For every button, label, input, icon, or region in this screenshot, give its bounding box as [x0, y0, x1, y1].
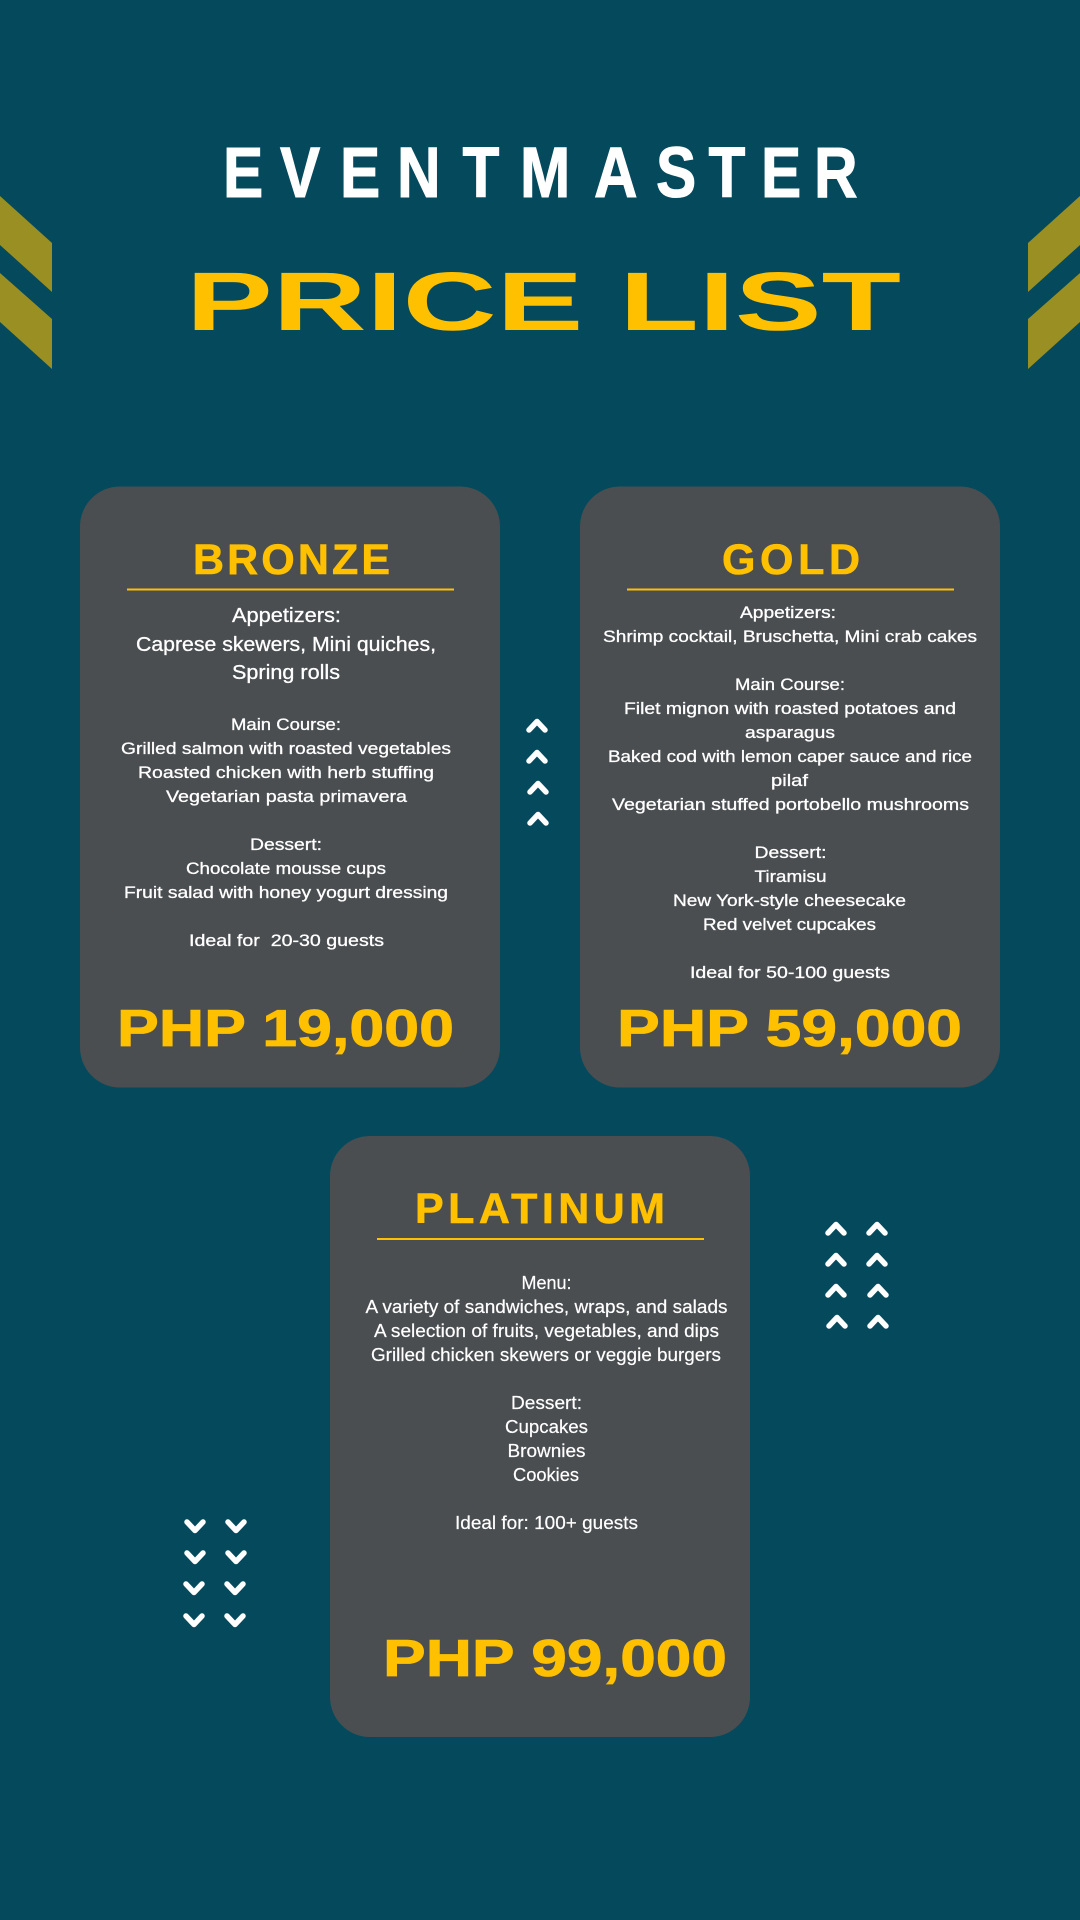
- text: bronze main course: Grilled salmon with roasted vegetables: [121, 739, 451, 758]
- text: platinum dessert: Cupcakes: [505, 1416, 588, 1437]
- text: platinum menu: A selection of fruits, vegetables, and dips: [374, 1320, 719, 1341]
- divider: gold: [627, 588, 954, 590]
- text: gold main course: Baked cod with lemon caper sauce and rice: [608, 747, 972, 766]
- text: bronze dessert: [124, 835, 448, 902]
- text: bronze dessert: Fruit salad with honey yogurt dressing: [124, 883, 448, 902]
- text: bronze guests: Ideal for 20-30 guests: [189, 931, 384, 950]
- text: bronze main course: Roasted chicken with herb stuffing: [138, 763, 434, 782]
- text: gold dessert: New York-style cheesecake: [673, 891, 906, 910]
- text: bronze dessert: Chocolate mousse cups: [186, 859, 386, 878]
- text: platinum dessert: Brownies: [508, 1440, 586, 1461]
- text: platinum guests: Ideal for: 100+ guests: [455, 1512, 638, 1533]
- heading: platinum: PLATINUM: [415, 1185, 665, 1233]
- text: bronze appetizers: [136, 605, 436, 684]
- heading: gold: GOLD: [722, 536, 860, 584]
- text: gold appetizers: Appetizers:: [740, 603, 836, 622]
- text: platinum dessert: [505, 1392, 588, 1485]
- text: gold main course: [608, 675, 972, 814]
- icon: left down chevrons: [186, 1522, 244, 1624]
- text: bronze dessert: Dessert:: [250, 835, 322, 854]
- text: gold main course: asparagus: [745, 723, 835, 742]
- icon: right up chevrons: [828, 1224, 886, 1326]
- text: gold main course: Main Course:: [735, 675, 845, 694]
- text: platinum menu: Grilled chicken skewers or veggie burgers: [371, 1344, 721, 1365]
- icon: centre up chevrons: [529, 722, 546, 823]
- title: EVENTMASTER: EVENTMASTER: [223, 132, 858, 212]
- text: bronze main course: Vegetarian pasta primavera: [166, 787, 408, 806]
- text: gold guests: Ideal for 50-100 guests: [690, 963, 890, 982]
- text: gold dessert: Tiramisu: [754, 867, 826, 886]
- text: platinum menu: Menu:: [522, 1272, 572, 1293]
- text: bronze appetizers: Spring rolls: [232, 662, 340, 684]
- text: gold main course: Vegetarian stuffed portobello mushrooms: [612, 795, 969, 814]
- divider: platinum: [377, 1238, 704, 1240]
- panel: bronze: [80, 486, 500, 1088]
- text: gold dessert: [673, 843, 906, 934]
- panel: gold: [580, 486, 1000, 1088]
- text: platinum menu: [366, 1272, 728, 1365]
- divider: bronze: [127, 588, 454, 590]
- text: platinum dessert: Cookies: [513, 1464, 579, 1485]
- price: bronze: PHP 19,000: [117, 1000, 454, 1058]
- text: platinum menu: A variety of sandwiches, wraps, and salads: [366, 1296, 728, 1317]
- text: bronze appetizers: Appetizers:: [232, 605, 341, 627]
- text: bronze appetizers: Caprese skewers, Mini quiches,: [136, 634, 436, 656]
- text: bronze main course: [121, 715, 451, 806]
- text: gold main course: Filet mignon with roasted potatoes and: [624, 699, 956, 718]
- panel: platinum: [330, 1136, 750, 1737]
- text: gold dessert: Red velvet cupcakes: [703, 915, 876, 934]
- text: bronze main course: Main Course:: [231, 715, 341, 734]
- heading: PRICE LIST: PRICE LIST: [186, 255, 901, 348]
- price: platinum: PHP 99,000: [383, 1630, 727, 1688]
- icon: left double chevrons: [0, 196, 52, 369]
- text: gold appetizers: Shrimp cocktail, Bruschetta, Mini crab cakes: [603, 627, 977, 646]
- heading: bronze: BRONZE: [193, 536, 390, 584]
- text: gold dessert: Dessert:: [754, 843, 826, 862]
- icon: right double chevrons: [1028, 196, 1080, 369]
- price: gold: PHP 59,000: [617, 1000, 962, 1058]
- text: gold main course: pilaf: [771, 771, 808, 790]
- text: platinum dessert: Dessert:: [511, 1392, 582, 1413]
- text: gold appetizers: [603, 603, 977, 646]
